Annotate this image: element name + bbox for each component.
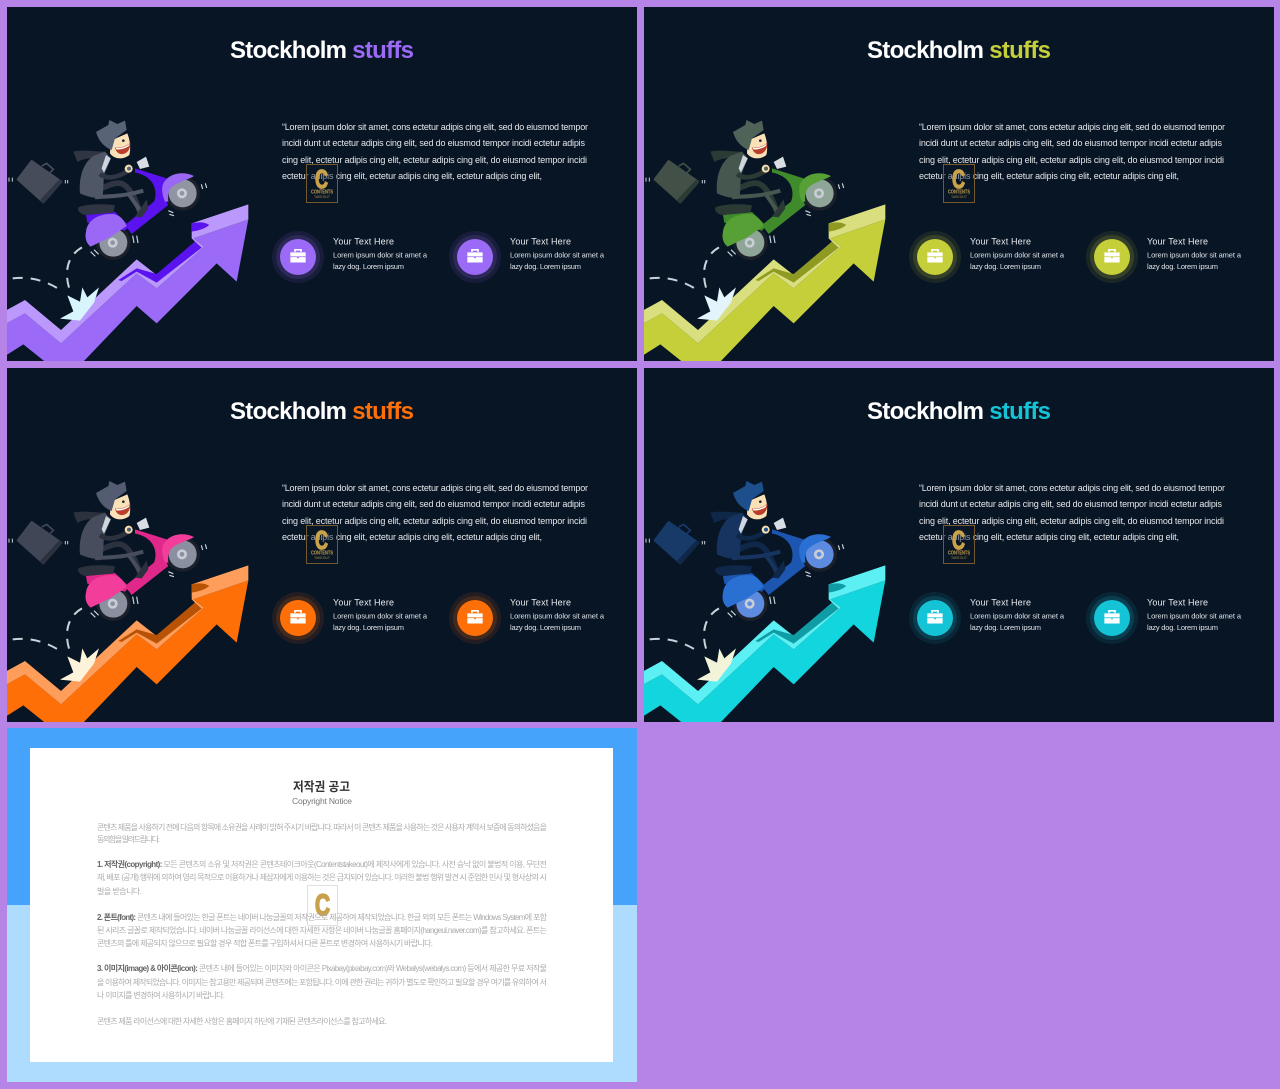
feature item 1: Lorem ipsum dolor sit amet a (333, 612, 428, 620)
notice section 1: copyright: 재, 배포 (공개) 행위에 의하여 영리 목적으로 이용하거나 제삼자에게 이용하는 것은 금지되어 있습니다. 이러한 불법 행위 발견 시 준엄한 민사 및 형사상의 시 (97, 872, 547, 882)
body text (919, 122, 1225, 181)
notice intro: 동의함을 알려드립니다. (97, 834, 160, 844)
watermark logo: TAKEOUT (314, 195, 331, 199)
watermark logo: CONTENTS (948, 190, 971, 196)
panel: purple slide (7, 7, 637, 361)
body text: ectetur adipis cing elit, ectetur adipis cing elit, ectetur adipis cing elit, (282, 171, 542, 181)
notice intro: 콘텐츠 제품을 사용하기 전에 다음의 항목에 소유권을 사례이 밝혀 주시기 바랍니다. 따라서 이 콘텐츠 제품을 사용하는 것은 사용자 계약서 보증에 동의하셨음을 (97, 822, 547, 832)
watermark logo: CONTENTS (311, 550, 334, 556)
feature item 2: Your Text Here (510, 236, 571, 246)
title: Stockholm stuffs (867, 398, 1051, 425)
feature item 1 (909, 592, 1065, 644)
notice section 1: copyright: 벌을 받습니다. (97, 886, 142, 896)
notice section 1: copyright (97, 859, 547, 896)
bounce trail and spark (13, 608, 99, 682)
notice section 2: font: 2. 폰트(font): 콘텐츠 내에 들어있는 한글 폰트는 네이버 나눔글꼴의 저작권으로 제공하여 제작되었습니다. 한글 외의 모든 폰트는 Windows System에 포함 (97, 912, 548, 922)
feature item 2 (1086, 592, 1242, 644)
watermark logo: TAKEOUT (951, 195, 968, 199)
panel: cyan slide (644, 368, 1274, 722)
watermark logo: C (952, 164, 965, 194)
feature item 1 (272, 231, 428, 283)
title: Stockholm stuffs (230, 37, 414, 64)
bounce trail and spark (650, 608, 736, 682)
feature item 1: Your Text Here (333, 598, 394, 608)
icon: flying briefcase (9, 522, 68, 564)
feature item 1 (272, 592, 428, 644)
watermark logo: TAKEOUT (951, 556, 968, 560)
watermark logo (306, 164, 338, 202)
watermark logo: C (315, 164, 328, 194)
body text (282, 483, 588, 542)
panel: copyright notice (7, 728, 637, 1082)
body text: “Lorem ipsum dolor sit amet, cons ectetur adipis cing elit, sed do eiusmod tempor (282, 483, 588, 493)
feature item 1: Lorem ipsum dolor sit amet a (333, 250, 428, 260)
body text: incidi dunt ut ectetur adipis cing elit, sed do eiusmod tempor incidi ectetur adipis (282, 499, 586, 509)
notice closing line: 콘텐츠 제품 라이선스에 대한 자세한 사항은 홈페이지 하단에 기재된 콘텐츠라이선스를 참고하세요. (97, 1016, 387, 1026)
feature item 1: lazy dog. Lorem ipsum (333, 262, 404, 271)
watermark logo: CONTENTS (311, 190, 334, 196)
icon: flying briefcase (9, 161, 68, 203)
icon: flying briefcase (646, 522, 705, 564)
feature item 2: Your Text Here (1147, 236, 1208, 246)
businessman on scooter (710, 481, 844, 621)
body text (919, 483, 1225, 542)
notice section 1: copyright: 1. 저작권(copyright): 모든 콘텐츠의 소유 및 저작권은 콘텐츠테이크아웃(Contentstakeout)에 제작사에게 있습니다. 사전 승낙 없이 불법적 이용, 무단전 (97, 859, 547, 869)
feature item 2: Lorem ipsum dolor sit amet a (1147, 250, 1242, 260)
growth arrow (644, 204, 885, 362)
notice subheading: Copyright Notice (292, 796, 352, 806)
notice section 3: images and icons (97, 963, 547, 1000)
body text: incidi dunt ut ectetur adipis cing elit, sed do eiusmod tempor incidi ectetur adipis (282, 138, 586, 148)
feature item 2 (449, 231, 605, 283)
feature item 1: Your Text Here (333, 237, 394, 247)
feature item 2: Lorem ipsum dolor sit amet a (510, 250, 605, 260)
body text: incidi dunt ut ectetur adipis cing elit, sed do eiusmod tempor incidi ectetur adipis (919, 138, 1222, 148)
feature item 2: Your Text Here (1147, 597, 1208, 607)
body text (282, 122, 588, 181)
panel: green slide (644, 7, 1274, 361)
growth arrow (7, 565, 248, 723)
notice section 3: images and icons: 나 이미지를 변경하여 사용하시기 바랍니다. (97, 990, 225, 1000)
notice section 3: images and icons: 3. 이미지(image) & 아이콘(icon): 콘텐츠 내에 들어있는 이미지와 아이콘은 Pixabay(pixabay.com)와 Webalys(webalys.com) 등에서 제공한 무료 저작물 (97, 963, 547, 973)
notice section 2: font (97, 912, 548, 948)
feature item 1: lazy dog. Lorem ipsum (970, 623, 1041, 632)
watermark logo: C (315, 889, 330, 922)
icon: flying briefcase (646, 161, 705, 203)
businessman on scooter (73, 481, 207, 621)
panel: orange slide (7, 368, 637, 722)
feature item 1: Lorem ipsum dolor sit amet a (970, 250, 1065, 260)
body text: cing elit, ectetur adipis cing elit, ectetur adipis cing elit, do eiusmod tempor incidi (282, 155, 587, 165)
notice intro (97, 822, 547, 844)
body text: “Lorem ipsum dolor sit amet, cons ectetur adipis cing elit, sed do eiusmod tempor (282, 122, 588, 132)
feature item 1: Your Text Here (970, 237, 1031, 247)
businessman on scooter (73, 120, 207, 260)
feature item 2: Lorem ipsum dolor sit amet a (1147, 612, 1242, 620)
feature item 2: Lorem ipsum dolor sit amet a (510, 612, 605, 620)
feature item 2: lazy dog. Lorem ipsum (510, 623, 581, 632)
feature item 1 (909, 231, 1065, 283)
body text: ectetur adipis cing elit, ectetur adipis cing elit, ectetur adipis cing elit, (919, 171, 1179, 181)
body text: cing elit, ectetur adipis cing elit, ectetur adipis cing elit, do eiusmod tempor incidi (919, 155, 1224, 165)
body text: cing elit, ectetur adipis cing elit, ectetur adipis cing elit, do eiusmod tempor incidi (282, 516, 587, 526)
feature item 1: lazy dog. Lorem ipsum (970, 262, 1041, 271)
businessman on scooter (710, 120, 844, 260)
body text: cing elit, ectetur adipis cing elit, ectetur adipis cing elit, do eiusmod tempor incidi (919, 516, 1224, 526)
feature item 1: Your Text Here (970, 598, 1031, 608)
watermark logo: TAKEOUT (314, 556, 331, 560)
watermark logo: C (315, 525, 328, 555)
bounce trail and spark (650, 247, 736, 321)
notice heading: 저작권 공고 (293, 779, 350, 794)
feature item 2: lazy dog. Lorem ipsum (1147, 623, 1218, 632)
growth arrow (644, 565, 885, 723)
feature item 2 (449, 592, 605, 644)
growth arrow (7, 204, 248, 362)
feature item 1: lazy dog. Lorem ipsum (333, 623, 404, 632)
feature item 1: Lorem ipsum dolor sit amet a (970, 612, 1065, 620)
notice section 3: images and icons: 을 이용하여 제작되었습니다. 이미지는 참고용만 제공되며 콘텐츠에는 포함됩니다. 이에 관한 권리는 귀하가 별도로 확인하고 필요할 경우 여기를 유의하여 서 (97, 977, 547, 987)
body text: ectetur adipis cing elit, ectetur adipis cing elit, ectetur adipis cing elit, (919, 532, 1179, 542)
watermark logo: CONTENTS (948, 550, 971, 556)
watermark logo (306, 525, 338, 564)
feature item 2: Your Text Here (510, 597, 571, 607)
body text: incidi dunt ut ectetur adipis cing elit, sed do eiusmod tempor incidi ectetur adipis (919, 499, 1222, 509)
body text: “Lorem ipsum dolor sit amet, cons ectetur adipis cing elit, sed do eiusmod tempor (919, 122, 1225, 132)
bounce trail and spark (13, 247, 99, 321)
notice section 2: font: 된 시리즈 글꼴로 제작되었습니다. 네이버 나눔글꼴 라이선스에 대한 자세한 사항은 네이버 나눔글꼴 홈페이지(hangeul.naver.com)를 참고하세요. 폰트는 (97, 925, 547, 935)
title: Stockholm stuffs (867, 37, 1051, 64)
notice section 2: font: 콘텐츠의 틀에 제공되지 않으므로 필요할 경우 적합 폰트를 구입하셔서 다른 폰트로 변경하여 사용하시기 바랍니다. (97, 938, 433, 948)
watermark logo (308, 886, 338, 926)
body text: ectetur adipis cing elit, ectetur adipis cing elit, ectetur adipis cing elit, (282, 532, 542, 542)
feature item 2 (1086, 231, 1242, 283)
feature item 2: lazy dog. Lorem ipsum (1147, 262, 1218, 271)
watermark logo: C (952, 525, 965, 555)
title: Stockholm stuffs (230, 398, 414, 425)
watermark logo (944, 164, 974, 202)
feature item 2: lazy dog. Lorem ipsum (510, 262, 581, 271)
body text: “Lorem ipsum dolor sit amet, cons ectetur adipis cing elit, sed do eiusmod tempor (919, 483, 1225, 493)
watermark logo (944, 525, 974, 564)
